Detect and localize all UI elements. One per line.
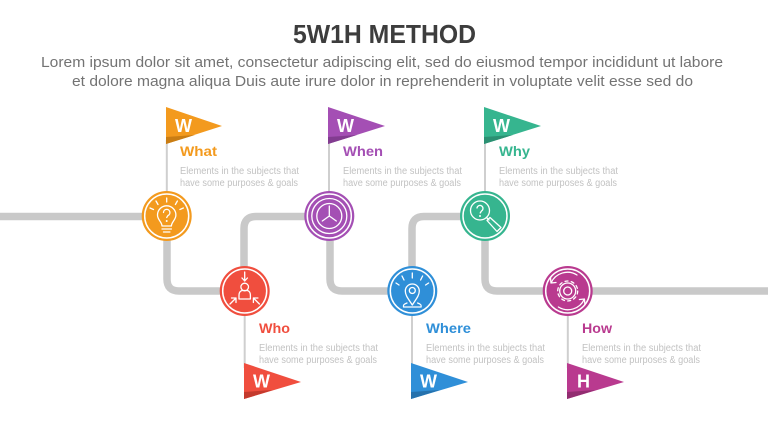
flag: what bbox=[166, 107, 222, 144]
icon: person with arrows bbox=[220, 266, 270, 316]
heading: what: What bbox=[180, 143, 217, 159]
description: how bbox=[582, 343, 701, 366]
flag: who bbox=[244, 363, 301, 399]
subtitle text bbox=[41, 54, 723, 90]
description: who: Elements in the subjects that bbox=[259, 343, 378, 354]
description: when: Elements in the subjects that bbox=[343, 166, 462, 177]
flag: where bbox=[411, 363, 468, 399]
panel: when bbox=[304, 107, 462, 241]
flag: how bbox=[567, 363, 624, 399]
flag pole: who bbox=[244, 316, 246, 368]
description: how: have some purposes & goals bbox=[582, 355, 700, 366]
flag pole: what bbox=[166, 140, 168, 192]
description: what: Elements in the subjects that bbox=[180, 166, 299, 177]
description: where bbox=[426, 343, 545, 366]
description: where: have some purposes & goals bbox=[426, 355, 544, 366]
description: where: Elements in the subjects that bbox=[426, 343, 545, 354]
flag pole: where bbox=[411, 316, 413, 368]
flag: who: W bbox=[253, 372, 270, 392]
flag: how: H bbox=[577, 372, 590, 392]
description: who: have some purposes & goals bbox=[259, 355, 377, 366]
icon: map pin bbox=[387, 266, 437, 316]
description: why bbox=[499, 166, 618, 189]
flag: when: W bbox=[337, 116, 354, 136]
heading: how: How bbox=[582, 320, 612, 336]
heading: where: Where bbox=[426, 320, 471, 336]
panel: why bbox=[460, 107, 618, 241]
description: how: Elements in the subjects that bbox=[582, 343, 701, 354]
flag: why bbox=[484, 107, 541, 144]
flag pole: when bbox=[328, 140, 330, 192]
flag: where: W bbox=[420, 372, 437, 392]
flag: why: W bbox=[493, 116, 510, 136]
description: why: have some purposes & goals bbox=[499, 178, 617, 189]
heading: why: Why bbox=[499, 143, 530, 159]
heading: when: When bbox=[343, 143, 383, 159]
icon: magnifier with question mark bbox=[460, 191, 510, 241]
description: what: have some purposes & goals bbox=[180, 178, 298, 189]
panel: how bbox=[543, 266, 701, 399]
panel: where bbox=[387, 266, 545, 399]
icon: light bulb bbox=[142, 191, 192, 241]
description: when bbox=[343, 166, 462, 189]
subtitle text: Lorem ipsum dolor sit amet, consectetur adipiscing elit, sed do eiusmod tempor incididunt ut labore bbox=[41, 54, 723, 71]
title: 5W1H METHOD bbox=[293, 19, 476, 49]
flag pole: how bbox=[567, 316, 569, 368]
winding timeline path bbox=[0, 216, 768, 291]
flag pole: why bbox=[484, 140, 486, 192]
description: what bbox=[180, 166, 299, 189]
heading: who: Who bbox=[259, 320, 290, 336]
icon: gear with cycle arrows bbox=[543, 266, 593, 316]
description: when: have some purposes & goals bbox=[343, 178, 461, 189]
flag: what: W bbox=[175, 116, 192, 136]
panel: who bbox=[220, 266, 378, 399]
icon: clock bbox=[304, 191, 354, 241]
description: why: Elements in the subjects that bbox=[499, 166, 618, 177]
panel: what bbox=[142, 107, 299, 241]
flag: when bbox=[328, 107, 385, 144]
description: who bbox=[259, 343, 378, 366]
subtitle text: et dolore magna aliqua Duis aute irure dolor in reprehenderit in voluptate velit esse sed do bbox=[72, 73, 693, 90]
